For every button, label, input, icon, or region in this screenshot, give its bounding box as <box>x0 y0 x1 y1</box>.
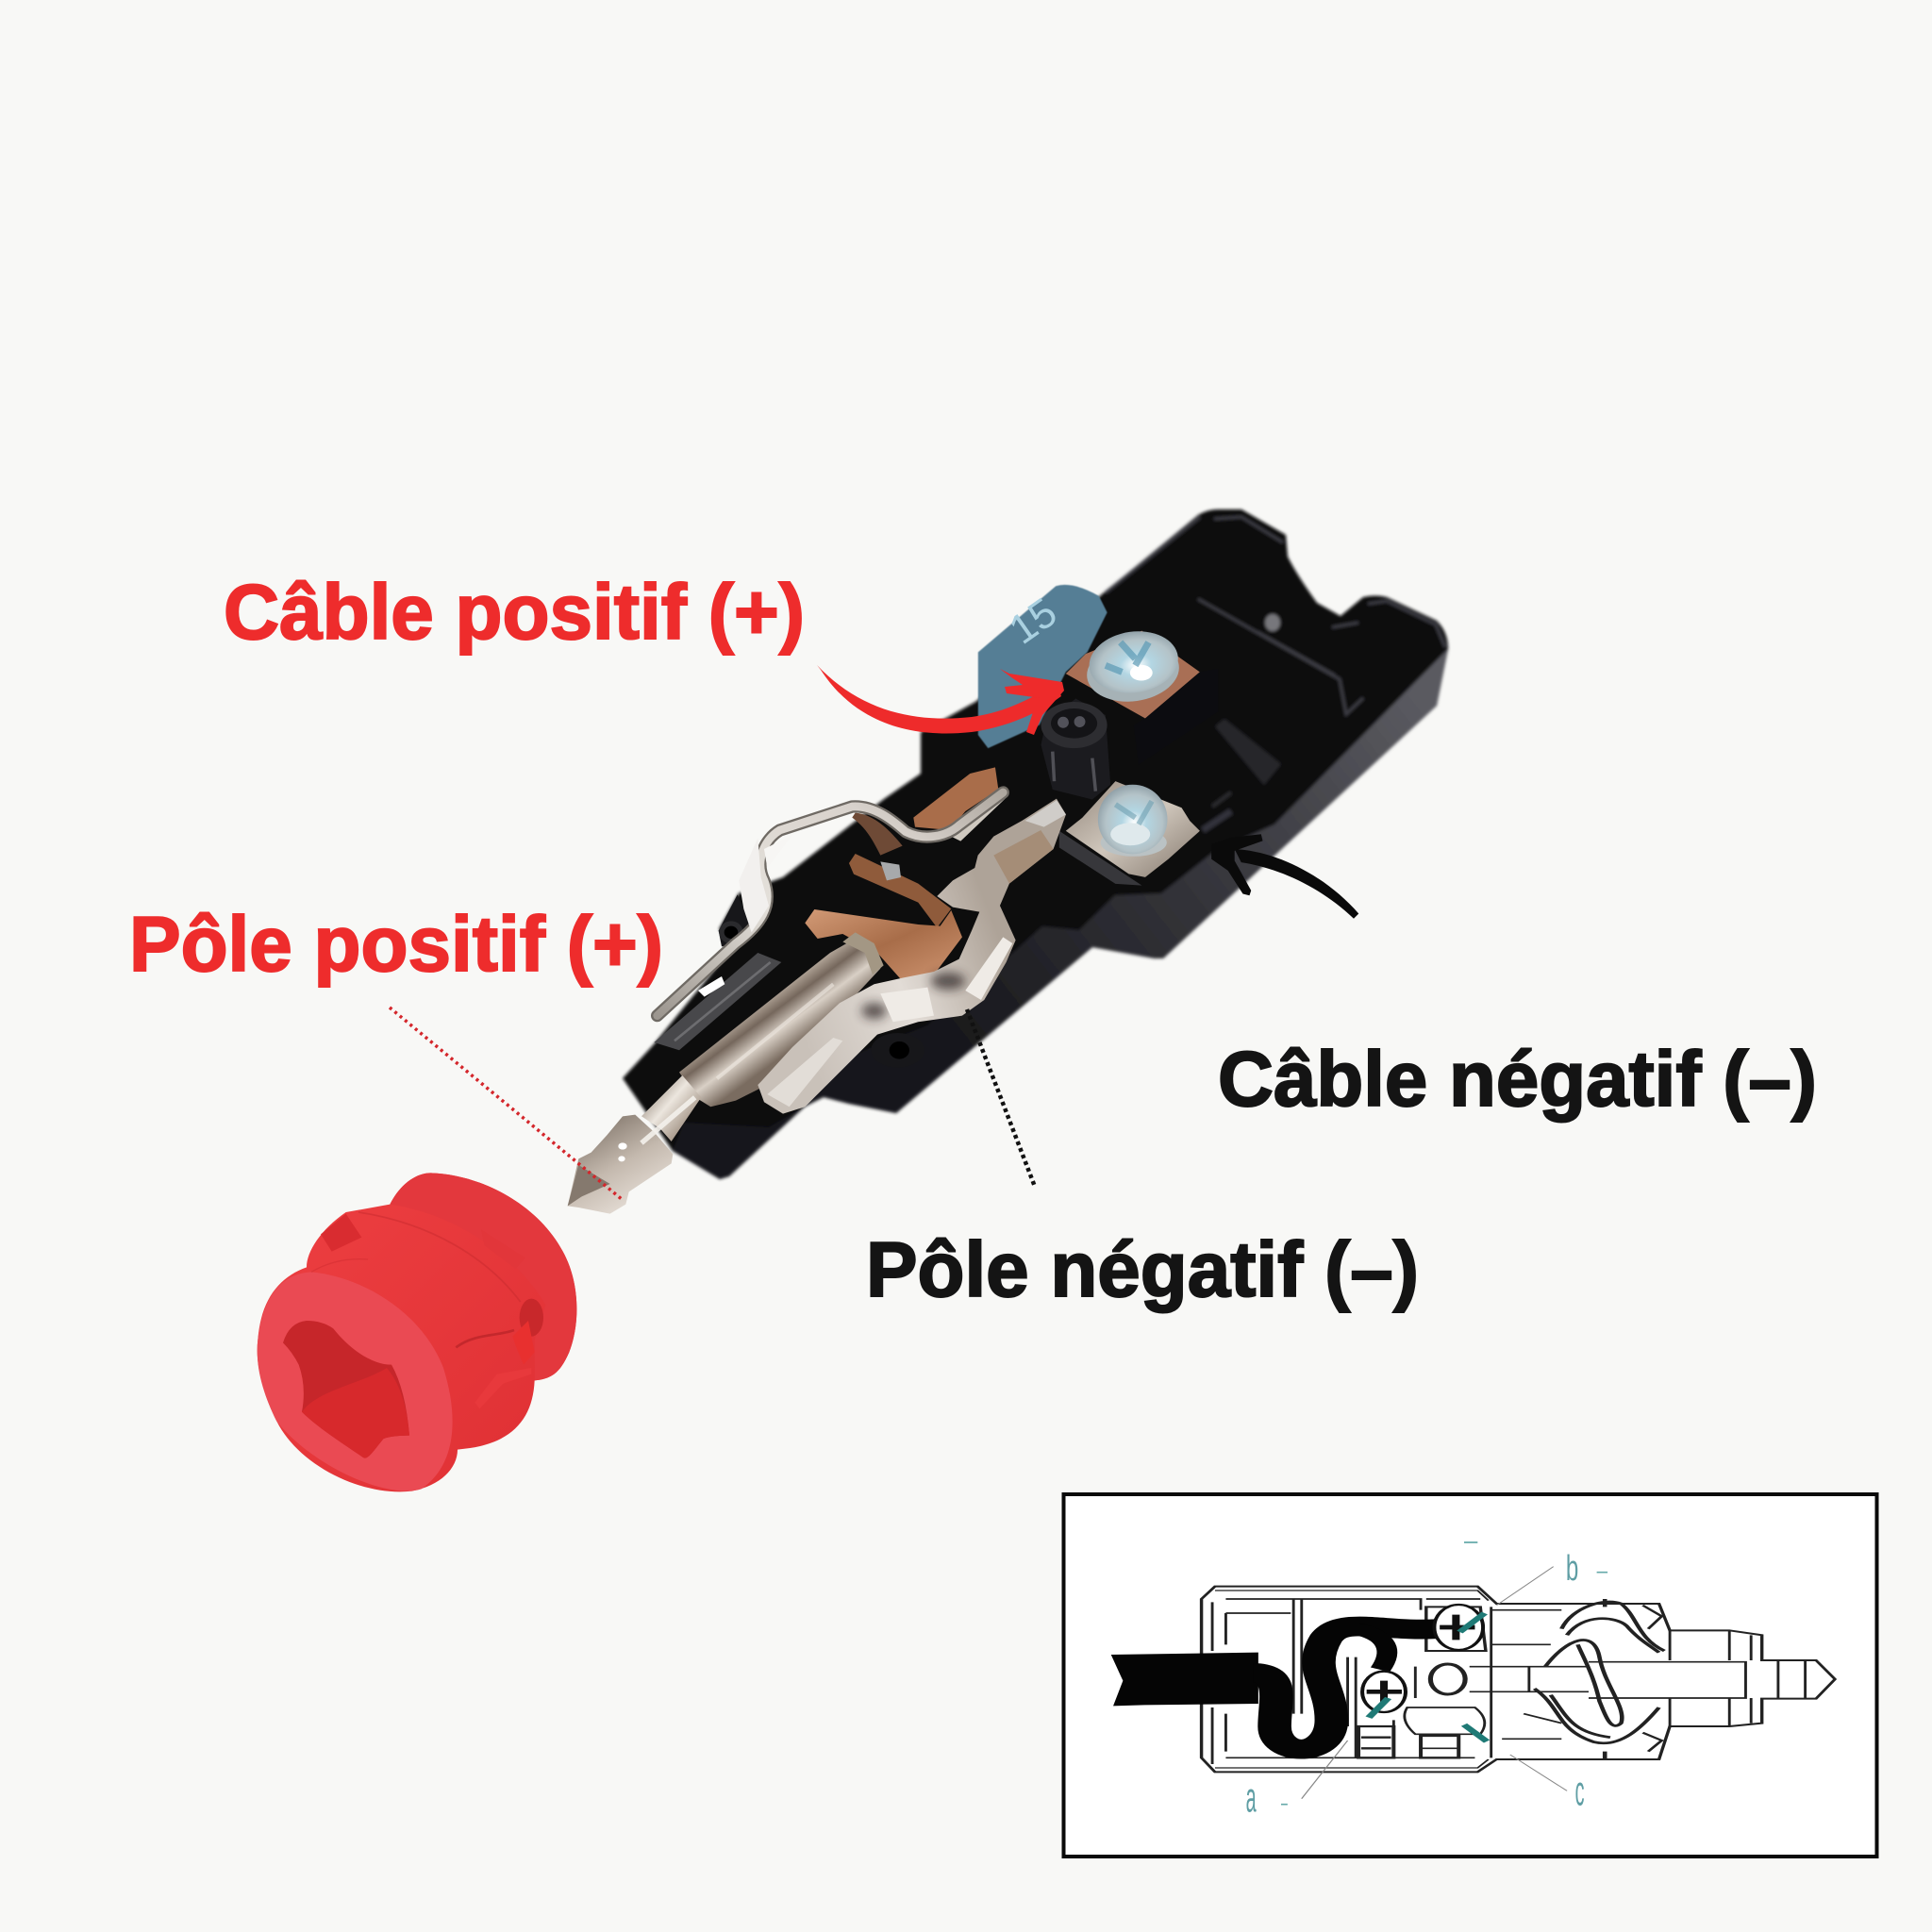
callout letters: a <box>1246 1775 1257 1822</box>
black cable bundle <box>1111 1626 1437 1749</box>
product photo: cigarette lighter plug internals <box>568 509 1448 1214</box>
callout letters: c <box>1575 1769 1585 1815</box>
label: Pôle négatif: Pôle négatif (–) <box>866 1225 1419 1313</box>
callout letters <box>1246 1547 1585 1822</box>
callout leader lines <box>1302 1567 1567 1799</box>
black arrow to negative cable <box>1211 834 1358 919</box>
red arrow to positive cable <box>817 665 1064 735</box>
label: Câble négatif: Câble négatif (–) <box>1218 1035 1817 1123</box>
cap front rim <box>258 1272 453 1491</box>
metal pin <box>641 932 884 1141</box>
cap hexagonal hole <box>283 1321 409 1458</box>
metal pin tip <box>568 1097 695 1214</box>
inset frame <box>1064 1494 1877 1857</box>
inset wiring diagram <box>1064 1494 1877 1857</box>
lower metal clip <box>758 799 1066 1114</box>
upper copper terminal and screw <box>1066 625 1218 765</box>
dotted leader: negative pole <box>967 1009 1035 1187</box>
cap side tabs <box>321 1214 361 1252</box>
plug outline drawing <box>1202 1587 1835 1772</box>
screws and teal pointers <box>1362 1605 1487 1741</box>
fuse 15 A <box>978 585 1108 748</box>
fuse 15 A: 15 <box>1001 589 1065 654</box>
callout dashes <box>1281 1542 1607 1805</box>
label: Pôle positif: Pôle positif (+) <box>129 900 663 988</box>
callout letters: b <box>1566 1547 1578 1588</box>
label: Câble positif: Câble positif (+) <box>224 568 805 656</box>
dotted leader: positive pole <box>390 1008 623 1200</box>
copper blade <box>913 767 1008 841</box>
connector black housing <box>623 509 1448 1179</box>
upper metal clip <box>654 792 1003 1050</box>
red protective cap <box>258 1173 576 1491</box>
cap back flange shading <box>390 1173 576 1380</box>
cap body <box>258 1173 576 1491</box>
copper spring contact <box>805 854 962 981</box>
lower silver terminal and screw <box>1059 781 1200 886</box>
black capacitor cylinder <box>1041 698 1110 799</box>
